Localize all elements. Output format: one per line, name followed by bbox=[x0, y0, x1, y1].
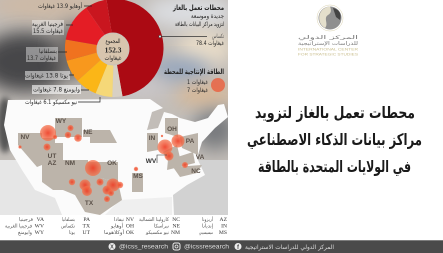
donut center total: غيغاوات bbox=[104, 55, 122, 62]
footer bar: @icssresearch bbox=[184, 244, 230, 250]
state abbreviation table: NV bbox=[126, 217, 134, 223]
state abbreviation table: نبراسكا bbox=[154, 224, 169, 230]
state abbreviation table: إنديانا bbox=[202, 224, 214, 230]
state labels: VA bbox=[196, 154, 205, 161]
West Virginia callout bbox=[146, 154, 167, 163]
chart heading: لتزويد مراكز البيانات بالطاقة bbox=[175, 21, 224, 28]
state abbreviation table: أريزونا bbox=[202, 216, 213, 223]
icon: instagram bbox=[173, 243, 180, 250]
state abbreviation table: OK bbox=[126, 230, 134, 236]
state abbreviation table: WY bbox=[35, 230, 44, 236]
state labels: MS bbox=[133, 173, 144, 180]
logo: ICSS bbox=[298, 5, 359, 56]
state labels: OH bbox=[167, 126, 177, 133]
state abbreviation table: VA bbox=[37, 217, 44, 223]
donut center total bbox=[97, 33, 129, 65]
state labels: OK bbox=[107, 160, 117, 167]
callouts left of donut: بنسلفانيا bbox=[39, 48, 57, 55]
state abbreviation table: وايومنغ bbox=[18, 230, 33, 236]
footer bar: المركز الدولي للدراسات الاستراتيجية bbox=[245, 244, 334, 251]
icon: X: X bbox=[110, 244, 114, 250]
state abbreviation table: تكساس bbox=[61, 224, 76, 230]
Texas callout: تكساس bbox=[212, 33, 224, 40]
chart heading bbox=[172, 4, 224, 28]
logo: ICSS: INTERNATIONAL CENTER bbox=[298, 46, 358, 52]
state labels bbox=[20, 118, 205, 207]
donut center total: 152.3 bbox=[105, 46, 122, 54]
bubble size legend: 1 غيغاوات bbox=[187, 79, 208, 86]
footer bar bbox=[0, 240, 443, 253]
state abbreviation table: MS bbox=[219, 230, 227, 236]
state abbreviation table: WV bbox=[35, 224, 44, 230]
state abbreviation table: فرجينيا الغربية bbox=[5, 224, 33, 230]
state abbreviation table: UT bbox=[83, 230, 91, 236]
state abbreviation table: TX bbox=[83, 224, 90, 230]
callouts left of donut: وايومنغ 7.8 غيغاوات bbox=[33, 86, 80, 94]
Texas callout bbox=[159, 33, 224, 47]
chart heading: جديدة وموسعة bbox=[191, 13, 224, 20]
callouts left of donut: 13.7 غيغاوات bbox=[27, 55, 56, 62]
state abbreviation table: بنسلفانيا bbox=[62, 217, 75, 223]
state abbreviation table: PA bbox=[83, 217, 90, 223]
state abbreviation table: فرجينيا bbox=[19, 217, 34, 223]
state labels: NE bbox=[83, 129, 93, 136]
state abbreviation table: نيو مكسيكو bbox=[145, 230, 169, 236]
callouts left of donut: فرجينيا الغربية bbox=[32, 21, 63, 28]
smoky sky background bbox=[0, 0, 237, 215]
Texas callout: 78.4 غيغاوات bbox=[196, 40, 224, 47]
icon: facebook: f bbox=[237, 245, 240, 251]
icon: facebook bbox=[234, 243, 242, 251]
callouts left of donut: يوتا 13.8 غيغاوات bbox=[25, 72, 68, 80]
state abbreviation table: NE bbox=[173, 224, 181, 230]
callouts left of donut bbox=[25, 2, 100, 106]
logo: ICSS: المركز الدولي bbox=[298, 35, 358, 41]
state abbreviation table: OH bbox=[126, 224, 134, 230]
main title bbox=[247, 103, 422, 177]
icon: X bbox=[108, 243, 116, 250]
state abbreviation table: NC bbox=[172, 217, 180, 223]
state labels: NV bbox=[20, 134, 30, 141]
chart heading: محطات تعمل بالغاز bbox=[172, 4, 224, 12]
map of the United States bbox=[4, 99, 228, 215]
state abbreviation table: NM bbox=[171, 230, 180, 236]
footer bar: @icss_research bbox=[119, 244, 169, 250]
state abbreviation table bbox=[0, 215, 228, 240]
state labels: AZ bbox=[48, 160, 56, 167]
state labels: PA bbox=[186, 138, 195, 145]
West Virginia callout: WV bbox=[146, 158, 157, 165]
callouts left of donut: أوهايو 13.9 غيغاوات bbox=[38, 2, 82, 10]
logo: ICSS: FOR STRATEGIC STUDIES bbox=[298, 52, 358, 56]
callouts left of donut: 15.5 غيغاوات bbox=[33, 28, 63, 35]
state abbreviation table: يوتا bbox=[69, 230, 76, 236]
state labels: NC bbox=[191, 168, 201, 175]
bubble size legend bbox=[164, 68, 225, 94]
donut center total: المجموع bbox=[106, 38, 121, 45]
state labels: IN bbox=[149, 135, 156, 142]
state labels: NM bbox=[65, 160, 75, 167]
icon: globe bbox=[317, 5, 343, 31]
logo: ICSS: للدراسات الإستراتيجية bbox=[298, 41, 359, 47]
bubble size legend: الطاقة الإنتاجية للمحطة bbox=[164, 68, 224, 76]
donut chart bbox=[65, 0, 164, 97]
state abbreviation table: أوهايو bbox=[110, 222, 124, 230]
plant capacity bubbles bbox=[18, 125, 188, 202]
state abbreviation table: AZ bbox=[220, 217, 228, 223]
state labels: WY bbox=[56, 118, 67, 125]
state abbreviation table: ميسيسيبي bbox=[199, 230, 213, 236]
state labels: UT bbox=[48, 153, 56, 160]
state abbreviation table: نيفادا bbox=[114, 217, 124, 223]
bubble size legend: 7 غيغاوات bbox=[187, 87, 208, 94]
state abbreviation table: IN bbox=[221, 224, 227, 230]
state labels: TX bbox=[85, 200, 94, 207]
callouts left of donut: نيو مكسيكو 6.1 غيغاوات bbox=[25, 99, 77, 106]
state abbreviation table: كارولينا الشمالية bbox=[139, 217, 170, 223]
state abbreviation table: أوكلاهوما bbox=[104, 229, 125, 236]
highlighted states bbox=[18, 118, 202, 215]
